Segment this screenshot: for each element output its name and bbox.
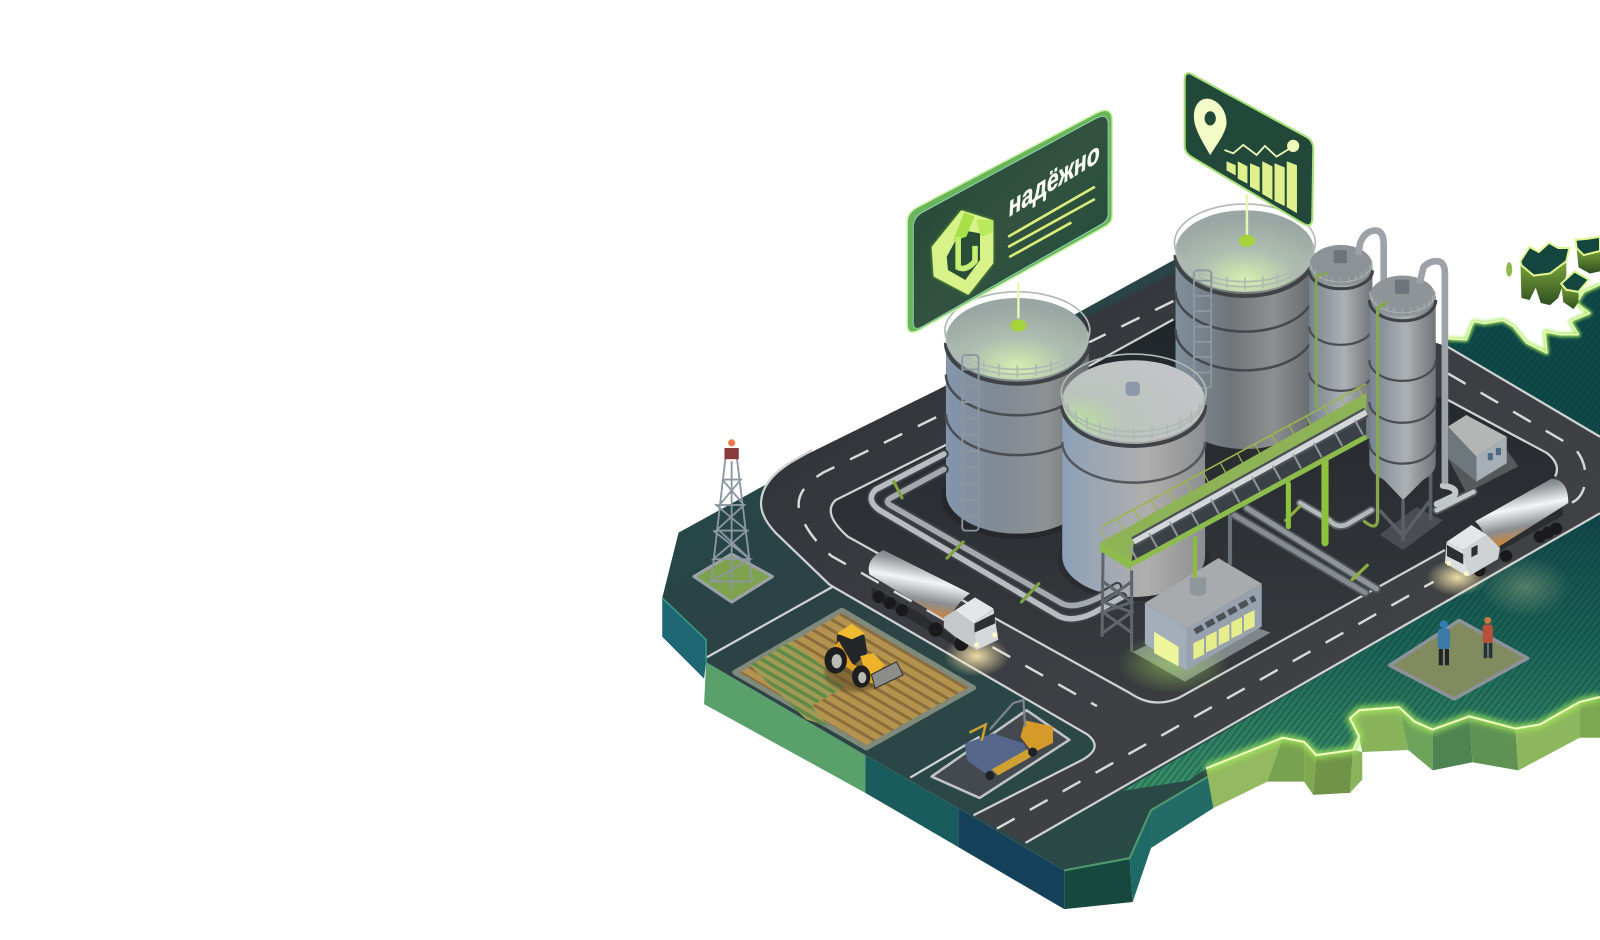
lime coastal cliff faces [1206,697,1600,808]
control building [1117,537,1270,694]
tanker truck right [1427,479,1568,596]
platform top surface [662,260,1449,870]
road network [707,273,1600,843]
terrain with hatched surface [1122,285,1600,791]
silo 5 [1363,261,1445,550]
logo hexagon [932,210,993,295]
platform side faces [662,598,1213,909]
chart line [1224,145,1292,157]
islands [1506,237,1600,309]
tractor [824,624,903,692]
sign word: надёжно [1008,134,1101,224]
tank 1 [941,292,1094,539]
sign stem left [1010,283,1027,332]
chrome pipe loop [871,454,1122,619]
pipe rack bridge [1100,384,1366,652]
sign: location and chart [1185,73,1313,225]
road edge lines [707,319,1600,843]
icon: map pin [1194,99,1227,155]
road light glow [1480,556,1571,617]
tanker truck left [869,550,1009,677]
sign stem right [1239,194,1255,247]
glowing coastline [1206,285,1600,768]
field [735,610,973,748]
gray pipes and columns behind bridge [1230,459,1473,593]
tank 2 [1057,354,1210,601]
road centre dashes [799,301,1585,829]
tank 3 [1171,204,1318,452]
utility box [1448,415,1518,493]
sign: надёжно [907,110,1112,332]
pin hole [1205,111,1216,126]
sign text lines [1008,187,1095,257]
chart bars [1227,161,1297,213]
silo 4 [1309,231,1384,439]
chart marker [1287,140,1299,152]
oil derrick [694,439,772,602]
workers pad [1390,617,1528,699]
service vehicle pad [932,700,1069,798]
